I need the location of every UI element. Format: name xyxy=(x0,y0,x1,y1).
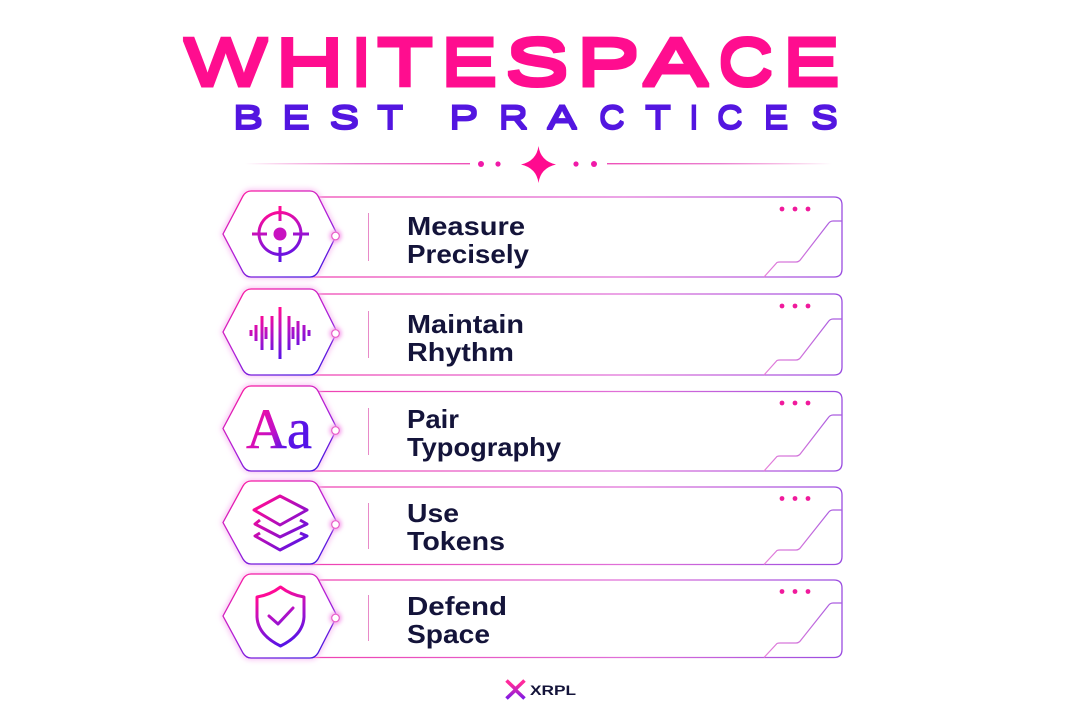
connector node xyxy=(330,612,342,624)
row 3: pair typography xyxy=(223,386,842,471)
subtitle: B xyxy=(233,100,263,136)
row 5 card xyxy=(300,580,842,658)
divider xyxy=(368,408,369,455)
row 4 corner decoration xyxy=(764,496,842,564)
icon: target xyxy=(252,206,309,262)
label: Defend xyxy=(407,591,507,621)
subtitle: R xyxy=(498,100,528,136)
ornament divider xyxy=(245,146,832,183)
label: Tokens xyxy=(407,526,505,556)
label: Maintain xyxy=(407,309,524,339)
subtitle: T xyxy=(645,100,671,136)
row 2 card xyxy=(300,294,842,375)
subtitle: P xyxy=(449,100,478,136)
divider xyxy=(368,311,369,358)
divider xyxy=(368,213,369,261)
icon: layers xyxy=(254,496,307,550)
title: E xyxy=(441,25,498,98)
row 1 corner decoration xyxy=(764,207,842,277)
label: Precisely xyxy=(407,239,530,269)
subtitle: C xyxy=(599,100,624,136)
row 4 card xyxy=(300,487,842,564)
label: Pair xyxy=(407,404,459,434)
row 1 card xyxy=(300,197,842,277)
divider xyxy=(368,503,369,549)
divider xyxy=(368,595,369,641)
subtitle: T xyxy=(377,100,403,136)
row 1 hexagon xyxy=(223,191,337,277)
icon: typography: Aa xyxy=(246,398,312,461)
label: Space xyxy=(407,619,490,649)
connector node xyxy=(330,424,342,436)
logo: XRPL xyxy=(506,680,576,698)
subtitle: E xyxy=(764,100,788,136)
row 1: measure precisely xyxy=(223,191,842,277)
subtitle: S xyxy=(811,100,838,136)
logo mark xyxy=(506,680,524,698)
title: P xyxy=(576,25,640,98)
row 5: defend space xyxy=(223,574,842,658)
connector node xyxy=(330,328,342,340)
title: S xyxy=(505,25,569,98)
row 3 corner decoration xyxy=(764,401,842,471)
subtitle: A xyxy=(548,100,577,136)
row 5 corner decoration xyxy=(764,589,842,658)
subtitle: S xyxy=(330,100,359,136)
subtitle: I xyxy=(689,100,699,136)
title: C xyxy=(718,25,773,98)
title: H xyxy=(275,25,344,98)
row 2 corner decoration xyxy=(764,304,842,375)
subtitle: C xyxy=(717,100,742,136)
row 4 hexagon xyxy=(223,481,337,564)
row 3 card xyxy=(300,392,842,471)
connector node xyxy=(330,230,342,242)
title: E xyxy=(782,25,840,98)
label: Typography xyxy=(407,432,562,462)
title: T xyxy=(377,25,433,98)
label: Use xyxy=(407,498,459,528)
row 4: use tokens xyxy=(223,481,842,564)
logo wordmark: XRPL xyxy=(530,683,576,698)
row 3 hexagon xyxy=(223,386,337,471)
row 5 hexagon xyxy=(223,574,337,658)
title: A xyxy=(644,25,708,98)
icon: shield check xyxy=(257,587,304,646)
title: W xyxy=(184,25,268,98)
subtitle: E xyxy=(282,100,310,136)
title: I xyxy=(350,25,372,98)
label: Measure xyxy=(407,211,525,241)
label: Rhythm xyxy=(407,337,514,367)
row 2: maintain rhythm xyxy=(223,289,842,375)
connector node xyxy=(330,518,342,530)
icon: waveform xyxy=(251,307,309,359)
row 2 hexagon xyxy=(223,289,337,375)
